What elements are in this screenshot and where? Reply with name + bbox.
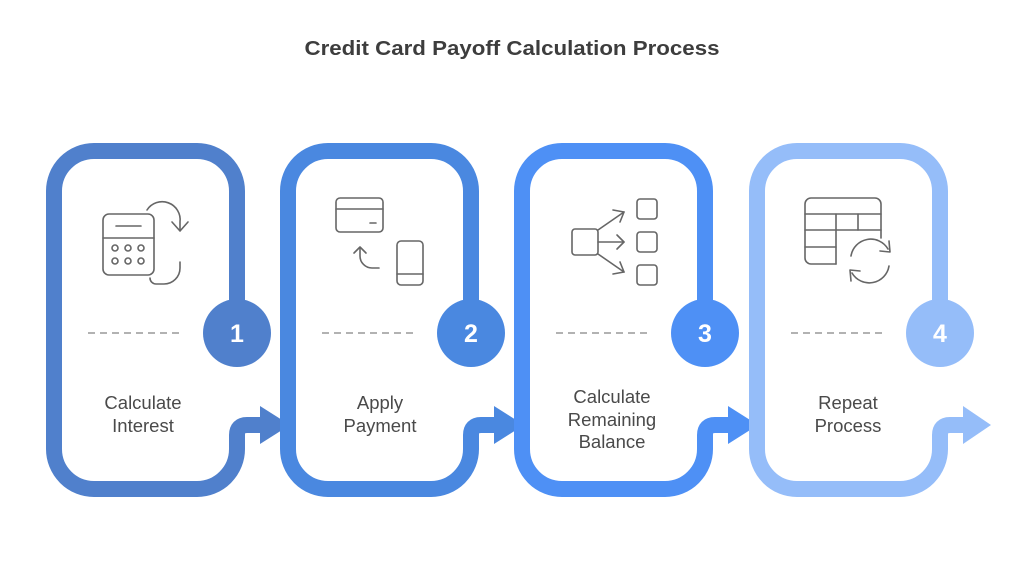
- arrow 2: [494, 406, 524, 444]
- number circle 3: [671, 299, 739, 367]
- icon: table with refresh: [805, 198, 890, 283]
- title: Credit Card Payoff Calculation Process: [304, 38, 720, 60]
- number circle 3: 3: [698, 320, 712, 348]
- label 3: Balance: [579, 431, 645, 452]
- card outline 2: [288, 151, 498, 489]
- number circle 1: [203, 299, 271, 367]
- card outline 1: [54, 151, 264, 489]
- panel: step 4 repeat process: [757, 151, 991, 489]
- arrow 3: [728, 406, 758, 444]
- label 2: Apply: [357, 392, 404, 413]
- icon: calculator with cycle: [103, 202, 188, 284]
- label 4: Process: [815, 415, 881, 436]
- number circle 2: 2: [464, 320, 478, 348]
- icon: card and phone: [336, 198, 423, 285]
- divider 1: [88, 332, 182, 334]
- arrow 1: [260, 406, 290, 444]
- card outline 4: [757, 151, 967, 489]
- label 1: Calculate: [104, 392, 182, 413]
- arrow 4: [963, 406, 991, 444]
- label 2: Payment: [343, 415, 417, 436]
- panel: step 2 apply payment: [288, 151, 524, 489]
- divider 3: [556, 332, 650, 334]
- panel: step 1 calculate interest: [54, 151, 290, 489]
- card outline 3: [522, 151, 732, 489]
- number circle 2: [437, 299, 505, 367]
- divider 2: [322, 332, 416, 334]
- label 3: Remaining: [568, 409, 656, 430]
- number circle 4: 4: [933, 320, 947, 348]
- label 4: Repeat: [818, 392, 878, 413]
- divider 4: [791, 332, 885, 334]
- number circle 1: 1: [230, 320, 244, 348]
- label 3: Calculate: [573, 386, 651, 407]
- icon: distribution: [572, 199, 657, 285]
- panel: step 3 calculate remaining balance: [522, 151, 758, 489]
- number circle 4: [906, 299, 974, 367]
- label 1: Interest: [112, 415, 174, 436]
